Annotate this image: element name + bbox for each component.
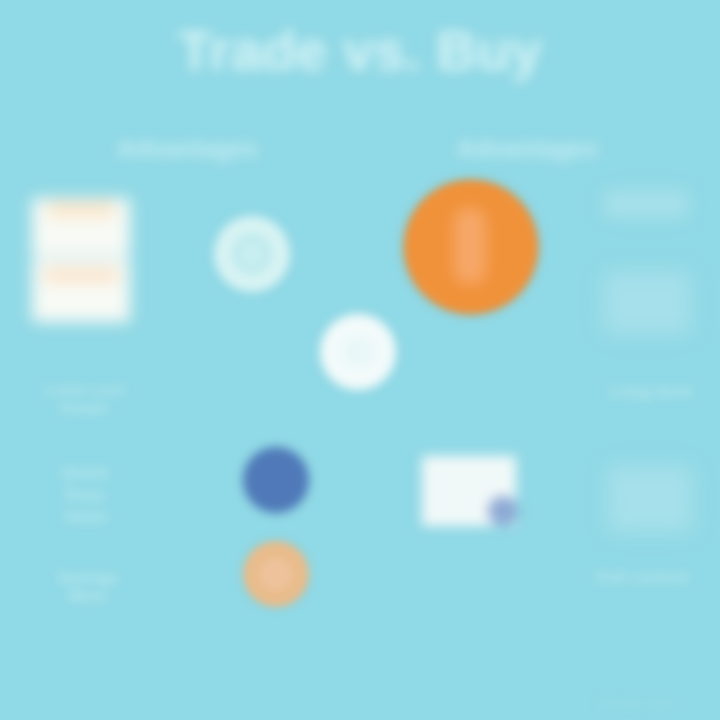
heading: right column: Advantages xyxy=(457,135,598,163)
text block: right fifth: Full control xyxy=(596,568,688,587)
text block: right upper xyxy=(604,190,688,218)
icon: small check circle xyxy=(208,210,296,298)
text block: right third: Long term xyxy=(609,382,693,401)
text block: left upper: Simple xyxy=(59,400,109,417)
icon: orange coin xyxy=(396,172,546,322)
text block: left middle: Quick xyxy=(61,463,109,482)
text block: left lower: More xyxy=(69,588,107,605)
icon: stacked cards xyxy=(22,187,140,332)
text block: left middle: Value xyxy=(63,507,107,526)
title: Trade vs. Buy xyxy=(178,19,542,82)
footer note: Source note xyxy=(597,695,673,711)
text block: right fourth xyxy=(608,466,692,532)
text block: left upper xyxy=(44,382,124,417)
text block: right second xyxy=(604,272,690,334)
icon: blue circle xyxy=(236,440,316,520)
icon: peach circle xyxy=(238,536,314,612)
text block: left lower xyxy=(57,570,119,605)
text block: left lower: Savings xyxy=(57,570,119,587)
icon: white circle xyxy=(314,308,402,396)
icon: white card with badge xyxy=(414,448,524,534)
text block: left middle xyxy=(61,463,109,526)
heading: left column: Advantages xyxy=(117,135,258,163)
text block: left upper: Lower cost xyxy=(44,382,124,399)
text block: left middle: Easy xyxy=(65,485,105,504)
